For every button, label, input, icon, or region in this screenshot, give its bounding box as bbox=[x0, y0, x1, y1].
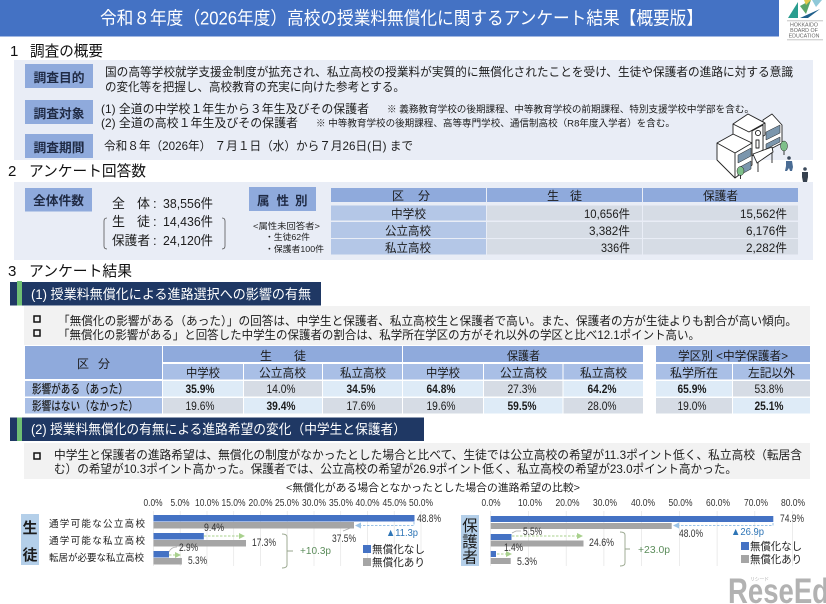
table: influence of free tuition: 34.5% bbox=[346, 382, 376, 396]
heading 1: 調査の概要 bbox=[30, 43, 103, 60]
note: no attribute answered: <属性未回答者> bbox=[253, 221, 320, 231]
section bar (1) bbox=[10, 281, 321, 306]
label: students: 生 bbox=[22, 520, 38, 537]
text: period: 令和８年（2026年） ７月１日（水）から７月26日(日) まで bbox=[104, 139, 413, 153]
legend: 無償化あり bbox=[372, 555, 425, 569]
label: by attribute bbox=[249, 187, 316, 211]
table: responses by attribute: 生 bbox=[547, 189, 559, 203]
title banner: 令和８年度（2026年度）高校の授業料無償化に関するアンケート結果【概要版】 bbox=[100, 8, 703, 28]
text: purpose: 国の高等学校就学支援金制度が拡充され、私立高校の授業料が実質的に無償化されたことを受け、生徒や保護者の進路に対する意識 bbox=[105, 64, 793, 79]
logo: Hokkaido Board of Education: BOARD OF bbox=[790, 28, 819, 34]
table: by school district: 私学所在 bbox=[670, 365, 718, 380]
label: total count: 全体件数 bbox=[33, 193, 84, 208]
label: students: 徒 bbox=[22, 547, 38, 564]
table: influence of free tuition: 区 bbox=[77, 357, 89, 371]
text: totals bbox=[104, 196, 225, 249]
table: influence of free tuition: 分 bbox=[98, 357, 110, 371]
heading 3: 3 bbox=[8, 263, 16, 280]
text: target: ※ 中等教育学校の後期課程、高等専門学校、通信制高校（R8年度入学者）を含む。 bbox=[316, 118, 675, 130]
text: target bbox=[101, 101, 754, 130]
panel: response counts bbox=[14, 182, 813, 260]
table: responses by attribute: 区 bbox=[392, 189, 404, 203]
value labels: 2.9% bbox=[179, 542, 198, 554]
heading 2: 2 bbox=[8, 163, 16, 180]
value labels: 9.4% bbox=[204, 522, 224, 534]
label: by attribute: 属 bbox=[257, 194, 270, 208]
table: responses by attribute: 15,562件 bbox=[740, 207, 787, 221]
legend bbox=[741, 539, 802, 566]
axis labels: 30.0% bbox=[302, 498, 326, 509]
note: no attribute answered: ・保護者100件 bbox=[265, 244, 325, 254]
value labels: 17.3% bbox=[252, 537, 276, 549]
table: influence of free tuition: 14.0% bbox=[266, 382, 296, 396]
value labels bbox=[504, 513, 804, 568]
table: responses by attribute: 3,382件 bbox=[589, 224, 630, 238]
axis labels bbox=[482, 498, 805, 509]
table: influence of free tuition: 64.2% bbox=[588, 382, 617, 396]
axis labels: 40.0% bbox=[356, 498, 380, 509]
legend: 無償化なし bbox=[750, 539, 802, 553]
text: purpose bbox=[105, 64, 793, 94]
text: totals: 保護者 bbox=[112, 233, 150, 248]
label: period bbox=[25, 134, 93, 158]
table: influence of free tuition: 28.0% bbox=[588, 399, 617, 413]
arrow: public decrease bbox=[343, 522, 414, 531]
arrow: private increase bbox=[169, 536, 244, 555]
table: by school district: 25.1% bbox=[754, 399, 784, 413]
value labels: 1.4% bbox=[504, 542, 523, 554]
axis labels: 50.0% bbox=[409, 498, 433, 509]
label: by attribute: 性 bbox=[276, 193, 290, 208]
value labels: 74.9% bbox=[780, 513, 804, 525]
table: responses by attribute: 2,282件 bbox=[746, 241, 787, 255]
section bar (2): (2) 授業料無償化の有無による進路希望の変化（中学生と保護者） bbox=[31, 422, 406, 437]
text: totals: 体 bbox=[137, 196, 150, 211]
heading 2: アンケート回答数 bbox=[29, 163, 146, 180]
value labels: 48.8% bbox=[417, 513, 441, 525]
table: responses by attribute: 徒 bbox=[570, 189, 582, 203]
category labels: 転居が必要な私立高校 bbox=[49, 552, 144, 564]
table: responses by attribute: 10,656件 bbox=[584, 207, 630, 221]
label: total count bbox=[25, 188, 92, 212]
label: target bbox=[25, 100, 93, 124]
arrow: private increase bbox=[497, 531, 582, 554]
axis labels: 70.0% bbox=[744, 498, 768, 509]
text: totals: 全 bbox=[112, 196, 125, 211]
table: influence of free tuition: 徒 bbox=[294, 349, 306, 363]
text: target: ※ 義務教育学校の後期課程、中等教育学校の前期課程、特別支援学校中学部を含む。 bbox=[387, 104, 754, 116]
legend bbox=[363, 542, 425, 569]
chart title: <無償化がある場合となかったとした場合の進路希望の比較> bbox=[286, 481, 580, 494]
table: influence of free tuition: 影響はない（なかった） bbox=[32, 398, 138, 413]
axis labels: 10.0% bbox=[195, 498, 219, 509]
table: influence of free tuition: 公立高校 bbox=[500, 366, 547, 380]
label: purpose: 調査目的 bbox=[34, 70, 84, 85]
section bar (1): (1) 授業料無償化による進路選択への影響の有無 bbox=[31, 287, 311, 302]
table: influence of free tuition: 19.6% bbox=[186, 399, 215, 413]
chart: guardians bbox=[461, 498, 805, 568]
text: totals: 生 bbox=[112, 214, 125, 229]
table: influence of free tuition: 19.6% bbox=[426, 399, 456, 413]
table: by school district: 65.9% bbox=[678, 382, 707, 396]
text: purpose: の変化等を把握し、高校教育の充実に向けた参考とする。 bbox=[105, 79, 405, 94]
axis labels: 10.0% bbox=[518, 498, 542, 509]
text block: findings (1) bbox=[24, 306, 810, 345]
table: by school district: 19.0% bbox=[678, 399, 707, 413]
table: responses by attribute: 公立高校 bbox=[385, 224, 431, 238]
table: by school district: 53.8% bbox=[754, 382, 784, 396]
logo: Hokkaido Board of Education: EDUCATION bbox=[789, 34, 820, 40]
legend: 無償化なし bbox=[372, 542, 425, 556]
value labels: 5.3% bbox=[517, 556, 537, 568]
axis labels: 15.0% bbox=[222, 498, 246, 509]
arrow: public decrease bbox=[674, 523, 773, 526]
value labels: 48.0% bbox=[679, 528, 703, 540]
text: totals: 14,436件 bbox=[163, 214, 213, 229]
text block: findings (1): 「無償化の影響がある（あった）」の回答は、中学生と保護者、私立高校生と保護者で高い。また、保護者の方が生徒よりも割合が高い傾向。 bbox=[58, 313, 797, 328]
callout: minus 26.9 points: ▲26.9p bbox=[731, 526, 764, 538]
value labels bbox=[179, 513, 441, 567]
table: influence of free tuition: 27.3% bbox=[508, 382, 537, 396]
table: responses by attribute bbox=[331, 188, 798, 255]
table: influence of free tuition: 私立高校 bbox=[580, 366, 627, 380]
text: target: (2) 全道の高校１年生及びその保護者 bbox=[101, 115, 298, 130]
text: totals: 38,556件 bbox=[163, 196, 213, 211]
axis labels: 0.0% bbox=[144, 498, 163, 509]
callout: plus 10.3 points: +10.3p bbox=[300, 545, 331, 557]
category labels: 通学可能な公立高校 bbox=[49, 518, 145, 530]
axis labels: 5.0% bbox=[170, 498, 190, 509]
text block: findings (2) bbox=[24, 443, 810, 479]
axis labels bbox=[144, 498, 433, 509]
text: totals: 徒 bbox=[137, 214, 150, 229]
axis labels: 25.0% bbox=[275, 498, 299, 509]
value labels: 5.5% bbox=[523, 526, 542, 538]
axis labels: 40.0% bbox=[631, 498, 655, 509]
bracket: private total bbox=[620, 532, 630, 566]
table: influence of free tuition: 35.9% bbox=[186, 382, 215, 396]
label: target: 調査対象 bbox=[34, 106, 85, 121]
category labels: 通学可能な私立高校 bbox=[49, 535, 145, 547]
table: influence of free tuition: 生 bbox=[260, 349, 272, 363]
text: totals: 24,120件 bbox=[163, 233, 213, 248]
table: influence of free tuition: 59.5% bbox=[508, 399, 537, 413]
table: influence of free tuition: 17.6% bbox=[346, 399, 376, 413]
section bar (2) bbox=[10, 418, 424, 441]
table: influence of free tuition: 64.8% bbox=[426, 382, 456, 396]
axis labels: 0.0% bbox=[482, 498, 501, 509]
table: responses by attribute: 6,176件 bbox=[746, 224, 787, 238]
text: totals: : bbox=[153, 196, 157, 211]
value labels: 24.6% bbox=[589, 537, 614, 549]
table: influence of free tuition: 私立高校 bbox=[340, 366, 386, 380]
legend: 無償化あり bbox=[750, 552, 802, 566]
text: totals: : bbox=[153, 214, 157, 229]
table: influence of free tuition bbox=[25, 346, 643, 414]
logo: Hokkaido Board of Education: HOKKAIDO bbox=[790, 22, 818, 28]
axis labels: 20.0% bbox=[556, 498, 580, 509]
text block: findings (2): 中学生と保護者の進路希望は、無償化の制度がなかったとした場合と比べて、生徒では公立高校の希望が11.3ポイント低く、私立高校（転居含 bbox=[54, 447, 802, 462]
axis labels: 60.0% bbox=[706, 498, 730, 509]
label: guardians: 護 bbox=[462, 533, 478, 551]
label: students bbox=[21, 514, 39, 565]
value labels: 5.3% bbox=[188, 555, 207, 567]
label: by attribute: 別 bbox=[295, 194, 308, 208]
watermark: ReseEd: リシード bbox=[750, 577, 769, 583]
text block: findings (2): む）の希望が10.3ポイント高かった。保護者では、公立高校の希望が26.9ポイント低く、私立高校の希望が23.0ポイント高かった。 bbox=[54, 461, 737, 476]
table: influence of free tuition: 中学校 bbox=[186, 365, 220, 380]
logo: Hokkaido Board of Education bbox=[787, 0, 823, 40]
heading 3: アンケート結果 bbox=[29, 263, 132, 280]
table: responses by attribute: 保護者 bbox=[703, 188, 738, 203]
axis labels: 45.0% bbox=[382, 498, 407, 509]
table: by school district: 左記以外 bbox=[748, 365, 795, 380]
text block: findings (1): 「無償化の影響がある」と回答した中学生の保護者の割合は、私学所在学区の方がそれ以外の学区と比べ12.1ポイント高い。 bbox=[58, 327, 700, 342]
label: guardians bbox=[461, 515, 479, 566]
category labels bbox=[49, 518, 145, 564]
axis labels: 35.0% bbox=[329, 498, 353, 509]
label: guardians: 者 bbox=[462, 548, 478, 566]
label: guardians: 保 bbox=[462, 517, 478, 535]
bracket: private total bbox=[282, 534, 293, 568]
axis labels: 30.0% bbox=[593, 498, 617, 509]
table: responses by attribute: 私立高校 bbox=[385, 241, 431, 255]
text: totals: : bbox=[153, 233, 157, 248]
table: by school district: 学区別 <中学保護者> bbox=[678, 348, 788, 363]
axis labels: 80.0% bbox=[781, 498, 805, 509]
chart: students bbox=[21, 498, 441, 569]
title banner bbox=[0, 0, 779, 36]
axis labels: 50.0% bbox=[668, 498, 693, 509]
table: influence of free tuition: 39.4% bbox=[266, 399, 296, 413]
note: no attribute answered bbox=[253, 221, 325, 254]
table: influence of free tuition: 公立高校 bbox=[259, 366, 306, 380]
heading 1: 1 bbox=[10, 43, 18, 60]
label: period: 調査期間 bbox=[34, 140, 84, 155]
text: target: (1) 全道の中学校１年生から３年生及びその保護者 bbox=[101, 101, 369, 116]
bars bbox=[491, 516, 773, 564]
label: purpose bbox=[25, 64, 93, 88]
table: responses by attribute: 336件 bbox=[601, 241, 630, 255]
table: responses by attribute: 分 bbox=[418, 189, 430, 203]
callout: minus 11.3 points: ▲11.3p bbox=[386, 527, 418, 539]
value labels: 37.5% bbox=[332, 533, 356, 545]
table: influence of free tuition: 影響がある（あった） bbox=[32, 381, 128, 396]
icon: school building and students bbox=[717, 114, 808, 182]
note: no attribute answered: ・生徒62件 bbox=[265, 232, 311, 242]
table: by school district bbox=[656, 346, 810, 414]
bars bbox=[154, 515, 414, 564]
panel: survey overview bbox=[14, 60, 813, 160]
axis labels: 20.0% bbox=[248, 498, 273, 509]
table: responses by attribute: 中学校 bbox=[391, 206, 426, 221]
table: influence of free tuition: 保護者 bbox=[507, 348, 540, 363]
callout: plus 23.0 points: +23.0p bbox=[638, 544, 670, 556]
table: influence of free tuition: 中学校 bbox=[426, 365, 460, 380]
